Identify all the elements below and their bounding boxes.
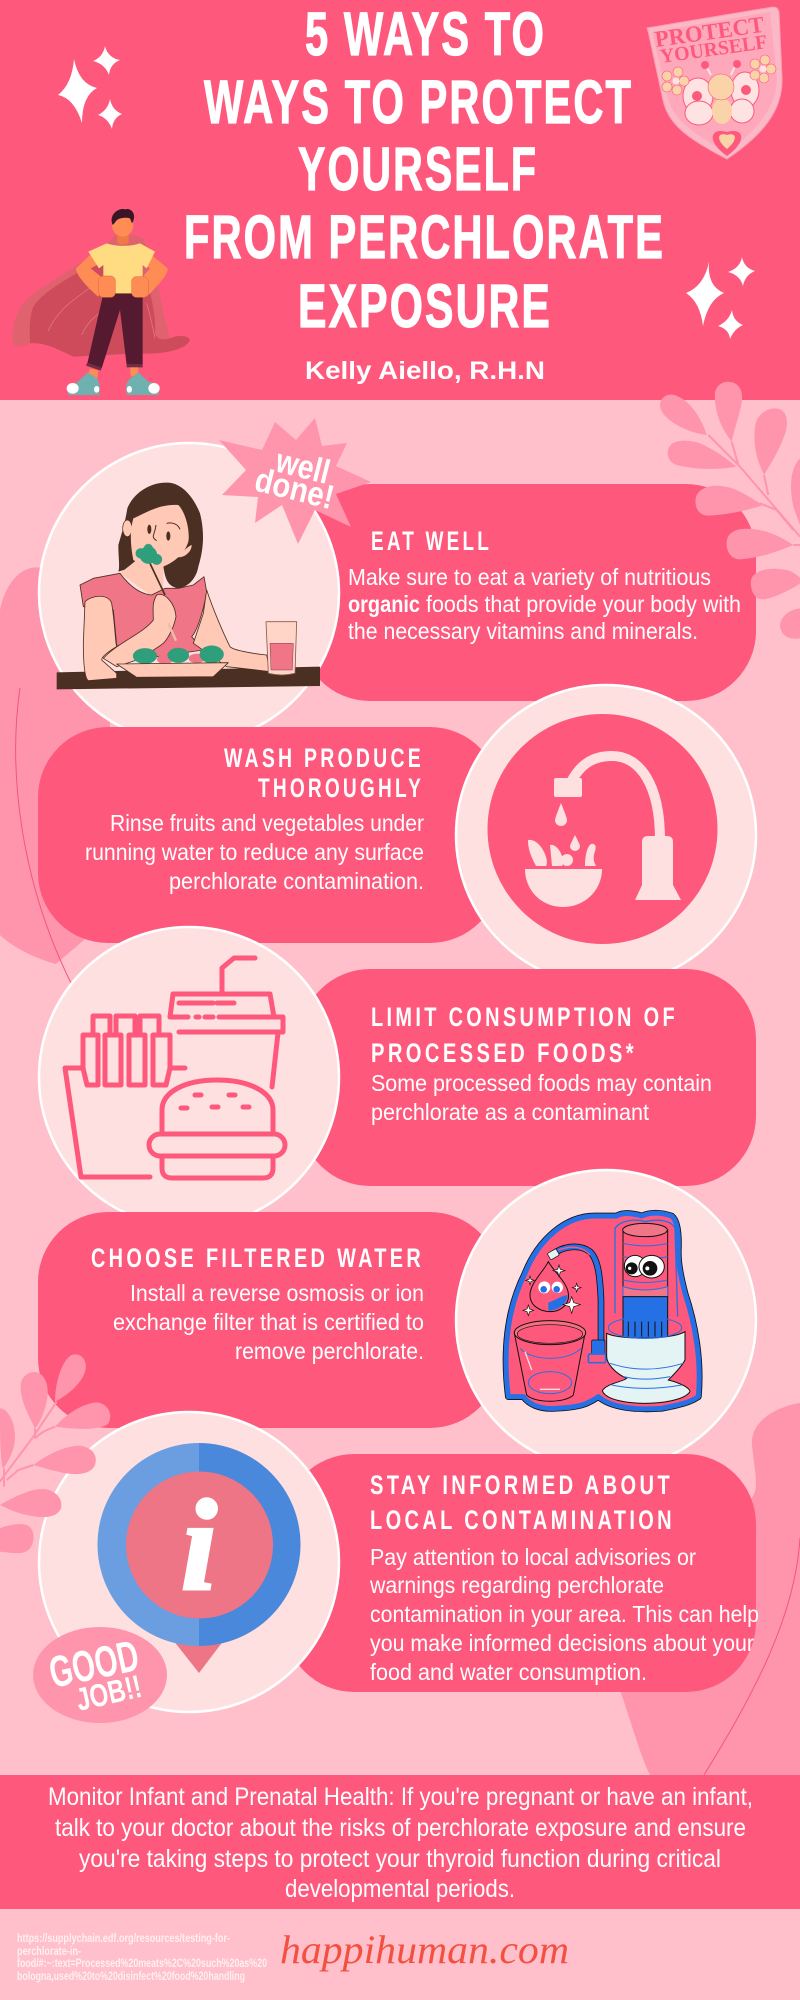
panel: stay informed card xyxy=(284,1454,759,1692)
panel: monitor infant and prenatal health: you're taking steps to protect your thyroid function during critical xyxy=(79,1845,721,1873)
panel: monitor infant and prenatal health: developmental periods. xyxy=(285,1875,515,1903)
text: filtered water body xyxy=(113,1280,424,1364)
callout: good job badge: JOB!! xyxy=(72,1668,145,1718)
source url: perchlorate-in- xyxy=(17,1944,81,1958)
thin line: left blob xyxy=(16,688,71,983)
text: stay informed body: Pay attention to local advisories or xyxy=(370,1544,696,1570)
text: stay informed body: food and water consumption. xyxy=(370,1659,647,1685)
heading: eat well: EAT WELL xyxy=(371,526,492,556)
icon: protect yourself badge: PROTECT xyxy=(653,12,766,52)
background blob: left xyxy=(0,567,110,964)
source url xyxy=(17,1931,267,1983)
circle: info icon xyxy=(39,1412,339,1712)
panel: wash produce card xyxy=(38,727,500,943)
panel: eat well card xyxy=(300,484,756,701)
illustration: superhero man xyxy=(13,209,190,395)
icon: protect yourself badge: YOURSELF xyxy=(659,31,769,68)
title: 5 WAYS TO xyxy=(305,0,546,68)
callout: well done badge: done! xyxy=(251,461,338,517)
callout: good job badge xyxy=(33,1627,167,1723)
circle: woman eating xyxy=(39,443,339,743)
source url: food/#:~:text=Processed%20meats%2C%20such%20as%20 xyxy=(17,1956,267,1970)
heading: wash produce: THOROUGHLY xyxy=(258,773,424,803)
leaves: bottom left xyxy=(0,1354,110,1553)
circle: water filter illustration xyxy=(456,1170,756,1470)
source url: bologna,used%20to%20disinfect%20food%20handling xyxy=(17,1969,245,1983)
header band xyxy=(0,0,800,400)
background blob: bottom right xyxy=(620,1403,800,1775)
text: limit consumption body: Some processed foods may contain xyxy=(371,1070,712,1096)
heading: limit consumption: LIMIT CONSUMPTION OF xyxy=(371,1002,678,1032)
text: eat well body: organic xyxy=(348,591,420,617)
author: Kelly Aiello, R.H.N xyxy=(305,357,545,385)
title xyxy=(184,0,665,340)
text: stay informed body: you make informed decisions about your xyxy=(370,1630,754,1656)
circle: fast food icon xyxy=(39,927,339,1227)
title: EXPOSURE xyxy=(298,272,552,340)
text: limit consumption body xyxy=(371,1070,712,1125)
icon: sparkles right xyxy=(686,257,755,339)
panel: filtered water card xyxy=(38,1212,500,1428)
callout: well done badge: well xyxy=(271,442,334,492)
text: eat well body: Make sure to eat a variety of nutritious xyxy=(348,564,711,590)
heading: limit consumption xyxy=(371,1002,678,1068)
circle: info icon: i xyxy=(181,1474,217,1618)
text: wash produce body: perchlorate contamination. xyxy=(169,868,424,894)
callout: well done badge xyxy=(219,418,371,544)
icon: sparkles left xyxy=(58,46,122,129)
title: YOURSELF xyxy=(298,135,538,203)
source url: https://supplychain.edf.org/resources/testing-for- xyxy=(17,1931,230,1945)
heading: stay informed: STAY INFORMED ABOUT xyxy=(370,1470,673,1500)
text: limit consumption body: perchlorate as a contaminant xyxy=(371,1099,650,1125)
heading: limit consumption: PROCESSED FOODS* xyxy=(371,1038,637,1068)
text: wash produce body xyxy=(85,810,424,894)
text: filtered water body: remove perchlorate. xyxy=(235,1338,424,1364)
website brand: happihuman.com xyxy=(280,1927,569,1972)
text: stay informed body: contamination in your area. This can help xyxy=(370,1601,759,1627)
text: stay informed body xyxy=(369,1544,759,1685)
panel: monitor infant and prenatal health xyxy=(0,1775,800,1909)
text: filtered water body: Install a reverse osmosis or ion xyxy=(130,1280,424,1306)
text: stay informed body: warnings regarding perchlorate xyxy=(369,1572,664,1598)
circle: faucet icon xyxy=(456,685,756,985)
text: eat well body xyxy=(348,564,741,644)
text: filtered water body: exchange filter that is certified to xyxy=(113,1309,424,1335)
text: eat well body: the necessary vitamins and minerals. xyxy=(348,618,698,644)
heading: stay informed xyxy=(370,1470,675,1535)
text: eat well body: foods that provide your body with xyxy=(426,591,741,617)
heading: wash produce xyxy=(224,743,424,803)
text: wash produce body: running water to reduce any surface xyxy=(85,839,424,865)
callout: good job badge: GOOD xyxy=(45,1631,143,1698)
panel: limit processed foods card xyxy=(300,969,756,1186)
heading: stay informed: LOCAL CONTAMINATION xyxy=(370,1505,675,1535)
leaves: top right xyxy=(660,382,800,639)
heading: wash produce: WASH PRODUCE xyxy=(224,743,424,773)
icon: protect yourself badge xyxy=(647,7,782,159)
text: wash produce body: Rinse fruits and vegetables under xyxy=(110,810,424,836)
heading: filtered water: CHOOSE FILTERED WATER xyxy=(91,1243,424,1273)
